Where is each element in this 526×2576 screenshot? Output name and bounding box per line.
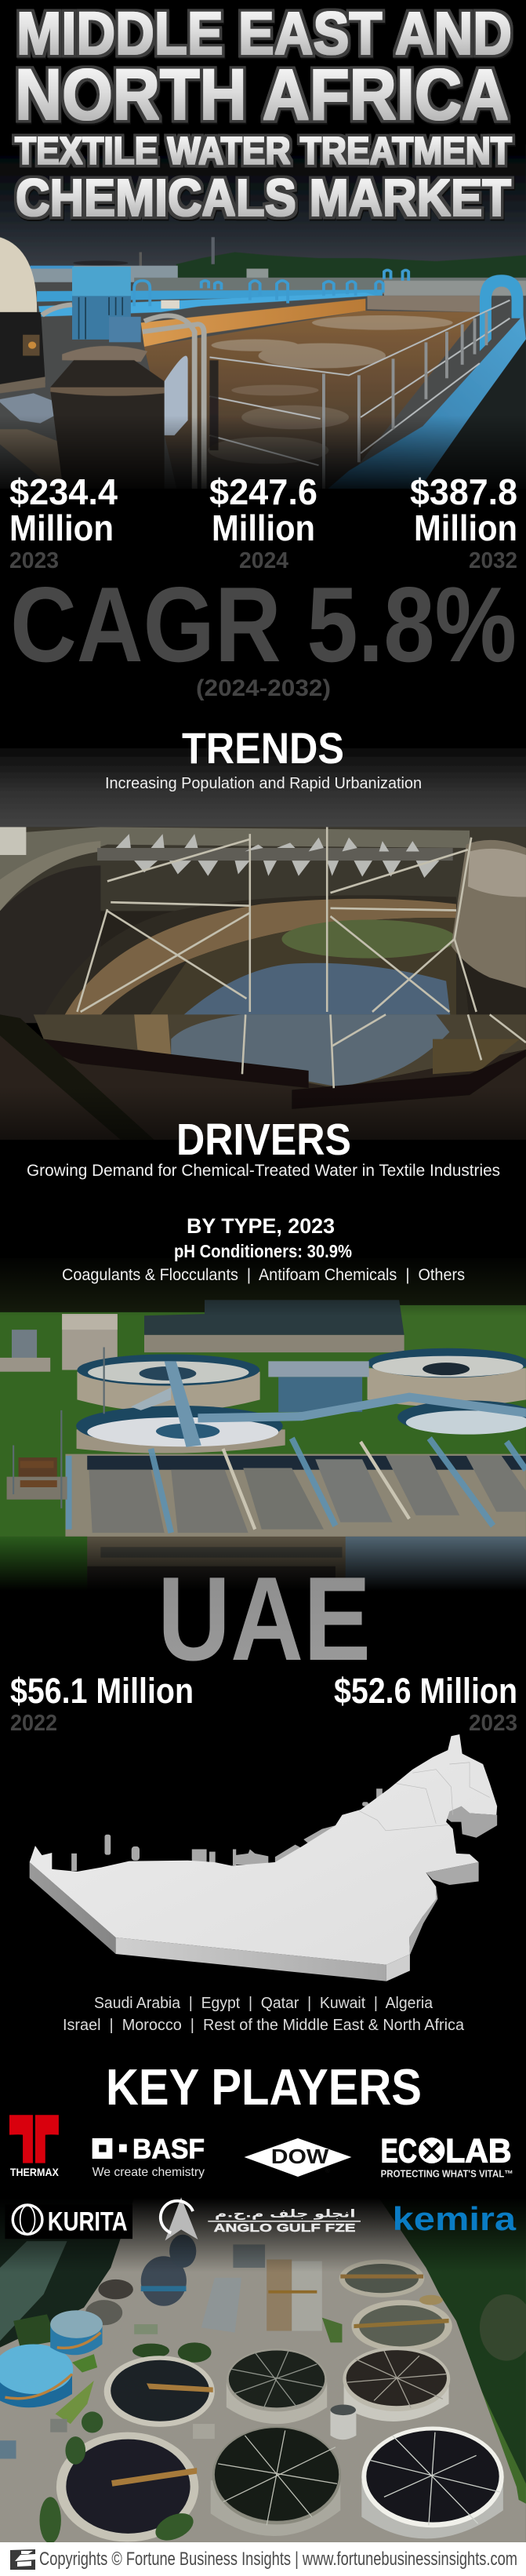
UAE values [10, 1671, 517, 1736]
photo: aerial treatment plant [0, 2195, 526, 2546]
icon: Fortune Business Insights mark [10, 2549, 35, 2570]
photo: aeration basin with blue pipes [0, 144, 526, 494]
logo: Anglo Gulf FZE: ANGLO GULF FZE [214, 2222, 356, 2235]
CAGR: (2024-2032) [196, 675, 331, 701]
logo: Ecolab: LAB [445, 2133, 512, 2170]
value 2023 [9, 471, 118, 573]
drivers heading: DRIVERS [176, 1115, 351, 1165]
other countries: Saudi Arabia | Egypt | Qatar | Kuwait | Algeria [94, 1995, 433, 2012]
value 2032 [410, 471, 517, 573]
value 2024: $247.6 [209, 471, 317, 512]
logo: Ecolab: EC [381, 2133, 417, 2170]
value 2032: 2032 [469, 548, 517, 573]
logo: Kurita [5, 2205, 132, 2239]
value 2023: Million [9, 508, 114, 548]
UAE values: 2022 [10, 1711, 57, 1736]
logos [5, 2115, 517, 2240]
title [15, 0, 512, 227]
trends heading [105, 723, 422, 792]
value 2023: $234.4 [9, 471, 118, 512]
footer [0, 2542, 526, 2576]
trends heading: TRENDS [182, 723, 344, 773]
logo: BASF [93, 2133, 205, 2179]
value 2024: Million [212, 508, 315, 548]
value 2023: 2023 [9, 548, 59, 573]
other countries [63, 1995, 465, 2034]
value 2032: $387.8 [410, 471, 517, 512]
value 2024: 2024 [239, 548, 288, 573]
photo: circular clarifier with screw [0, 748, 526, 1140]
logo: Ecolab: PROTECTING WHAT'S VITAL™ [381, 2167, 513, 2179]
logo: Dow: ® [325, 2167, 330, 2174]
logo: Dow [245, 2138, 351, 2177]
logo: Dow: DOW [271, 2145, 328, 2168]
logo: Anglo Gulf FZE [161, 2197, 361, 2240]
by type section: BY TYPE, 2023 [187, 1214, 335, 1238]
UAE values: 2023 [469, 1711, 517, 1736]
logo: BASF: We create chemistry [93, 2166, 205, 2179]
photo: treatment plant with clarifiers [0, 1257, 526, 1598]
other countries: Israel | Morocco | Rest of the Middle East & North Africa [63, 2017, 465, 2034]
by type section: Coagulants & Flocculants | Antifoam Chemicals | Others [62, 1266, 465, 1284]
UAE heading: UAE [158, 1552, 371, 1686]
market values [9, 471, 517, 573]
logo: Thermax: THERMAX [10, 2167, 59, 2178]
drivers heading: Growing Demand for Chemical-Treated Water in Textile Industries [27, 1162, 500, 1180]
logo: Kurita: KURITA [48, 2207, 128, 2237]
trends heading: Increasing Population and Rapid Urbanization [105, 775, 422, 792]
logo: Ecolab [381, 2133, 513, 2179]
logo: Thermax [9, 2115, 59, 2178]
value 2032: Million [414, 508, 517, 548]
UAE values: $56.1 Million [10, 1671, 194, 1711]
logo: BASF: BASF [132, 2133, 205, 2164]
by type section: pH Conditioners: 30.9% [174, 1241, 352, 1261]
drivers heading [27, 1115, 500, 1180]
value 2024 [209, 471, 317, 573]
logo: Kemira: kemira [393, 2200, 517, 2237]
logo: Anglo Gulf FZE: انجلو جلف م.ح.م [215, 2208, 356, 2221]
by type section [62, 1214, 465, 1284]
key players heading: KEY PLAYERS [106, 2058, 422, 2116]
map: UAE 3D [30, 1734, 497, 1981]
